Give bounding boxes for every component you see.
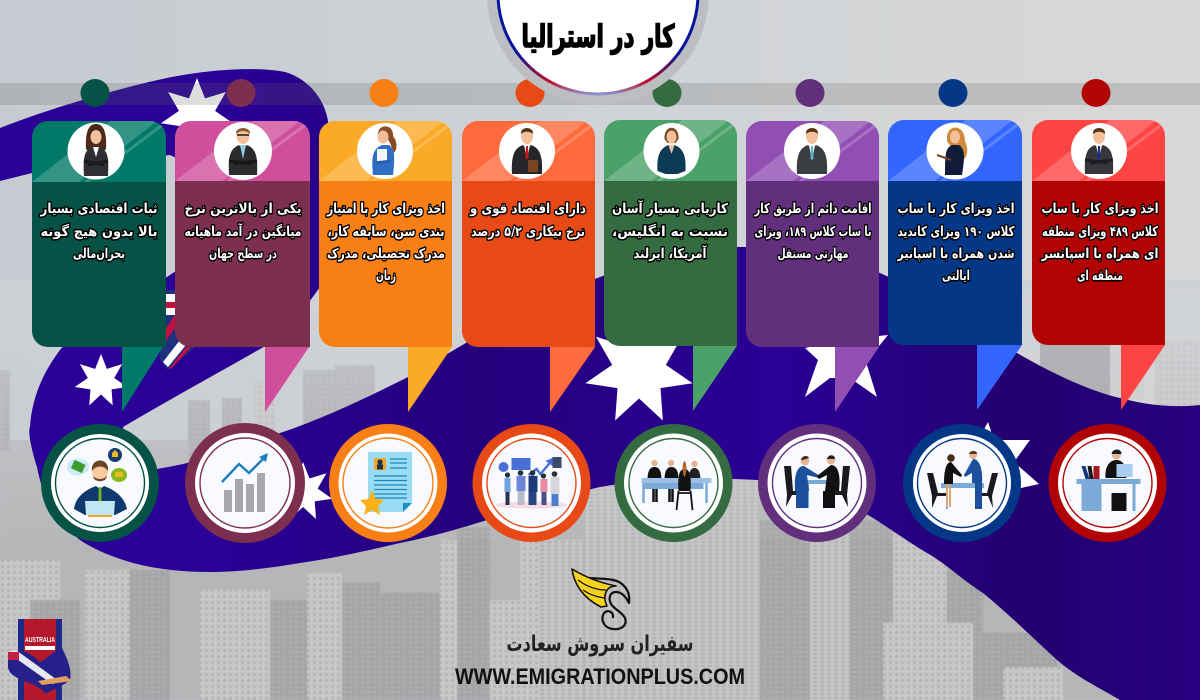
tail bbox=[550, 347, 595, 412]
tail bbox=[977, 345, 1022, 410]
card text: کلاس ۱۹۰ ویزای کاندید bbox=[898, 224, 1015, 240]
header bbox=[319, 121, 452, 181]
title badge bbox=[487, 0, 709, 105]
tail bbox=[1121, 345, 1165, 410]
header bbox=[32, 121, 166, 182]
card 5 bbox=[604, 120, 742, 411]
body bbox=[746, 181, 879, 347]
avatar bbox=[784, 123, 840, 179]
card text: اخذ ویزای کار با ساب bbox=[1042, 201, 1158, 217]
body bbox=[604, 181, 737, 346]
header bbox=[604, 120, 737, 181]
card text: اقامت دائم از طریق کار bbox=[754, 201, 872, 217]
avatar bbox=[499, 123, 555, 179]
card text: اخذ ویزای کار با امتیاز bbox=[326, 201, 445, 217]
card text: در سطح جهان bbox=[209, 246, 277, 262]
card 8 bbox=[1032, 120, 1170, 410]
card text bbox=[469, 201, 586, 240]
icon: man at office desk bbox=[1048, 424, 1166, 542]
tail bbox=[408, 347, 452, 412]
icon: businessman with money bubbles bbox=[41, 424, 159, 542]
tail bbox=[265, 347, 309, 412]
body bbox=[32, 182, 166, 347]
card text: منطقه ای bbox=[1077, 268, 1123, 284]
australia badge: AUSTRALIA bbox=[25, 637, 55, 644]
body bbox=[888, 181, 1022, 345]
card text: آمریکا، ایرلند bbox=[634, 245, 707, 262]
icon: interview panel bbox=[614, 424, 732, 542]
card 6 bbox=[746, 121, 884, 412]
card text: کاریابی بسیار آسان bbox=[612, 200, 728, 217]
card 7 bbox=[888, 120, 1026, 410]
card text: بحران‌مالی bbox=[73, 246, 125, 262]
icon: crowd with graphs bbox=[472, 424, 590, 542]
card text bbox=[1041, 201, 1158, 284]
card 4 bbox=[462, 121, 600, 412]
card text: میانگین در آمد ماهیانه bbox=[184, 223, 302, 240]
tail bbox=[122, 347, 163, 412]
card text: کلاس ۴۸۹ ویزای منطقه bbox=[1042, 224, 1158, 240]
card text: با ساب کلاس ۱۸۹، ویزای bbox=[754, 224, 872, 240]
avatar bbox=[644, 123, 700, 179]
tail bbox=[693, 346, 737, 411]
icon: business handshake bbox=[758, 424, 876, 542]
card 2 bbox=[175, 121, 313, 412]
card text: نسبت به انگلیس، bbox=[612, 223, 728, 240]
header bbox=[175, 121, 310, 181]
avatar bbox=[214, 122, 272, 180]
company name: سفیران سروش سعادت bbox=[506, 632, 694, 657]
card text bbox=[184, 201, 302, 262]
card text: شدن همراه با اسپانیر bbox=[897, 246, 1014, 262]
card 3 bbox=[319, 121, 457, 412]
card text: بندی سن، سابقه کار، bbox=[328, 224, 444, 240]
header bbox=[462, 121, 595, 181]
website url: WWW.EMIGRATIONPLUS.COM bbox=[455, 664, 745, 689]
timeline band bbox=[0, 83, 1200, 105]
avatar bbox=[357, 123, 413, 179]
card text: دارای اقتصاد قوی و bbox=[469, 201, 586, 217]
tail bbox=[835, 347, 879, 412]
body bbox=[175, 181, 310, 347]
avatar bbox=[926, 122, 984, 180]
card text: مدرک تحصیلی، مدرک bbox=[327, 246, 445, 262]
card text: بالا بدون هیچ گونه bbox=[40, 223, 158, 240]
header bbox=[746, 121, 879, 181]
flag stars bbox=[75, 78, 1039, 519]
header bbox=[888, 120, 1022, 181]
card text: یکی از بالاترین نرخ bbox=[184, 201, 302, 217]
card text bbox=[897, 201, 1015, 284]
card text: ایالتی bbox=[942, 268, 970, 284]
card text: زبان bbox=[376, 268, 396, 284]
avatar bbox=[1071, 123, 1127, 179]
card text: مهارتی مستقل bbox=[778, 246, 848, 262]
card text bbox=[40, 201, 158, 262]
card 1 bbox=[32, 121, 170, 412]
card text bbox=[754, 201, 872, 262]
header bbox=[1032, 120, 1165, 181]
body bbox=[1032, 181, 1165, 345]
avatar bbox=[68, 122, 124, 180]
icon: resume document bbox=[329, 424, 447, 542]
card text bbox=[612, 200, 728, 262]
logo: golden swan wing bbox=[572, 569, 629, 629]
body bbox=[462, 181, 595, 347]
timeline dots bbox=[80, 79, 1110, 107]
card text: نرخ بیکاری ۵/۲ درصد bbox=[471, 224, 585, 240]
union jack fragment bbox=[160, 290, 195, 370]
card text bbox=[326, 201, 445, 284]
icon: rising bar chart bbox=[185, 423, 305, 543]
title: کار در استرالیا bbox=[522, 19, 675, 55]
body bbox=[319, 181, 452, 347]
australia badge bbox=[7, 619, 72, 700]
card text: ثبات اقتصادی بسیار bbox=[40, 201, 158, 217]
card text: ای همراه با اسپانسر bbox=[1041, 246, 1158, 262]
icon: meeting at table bbox=[903, 424, 1021, 542]
card text: اخذ ویزای کار با ساب bbox=[898, 201, 1014, 217]
